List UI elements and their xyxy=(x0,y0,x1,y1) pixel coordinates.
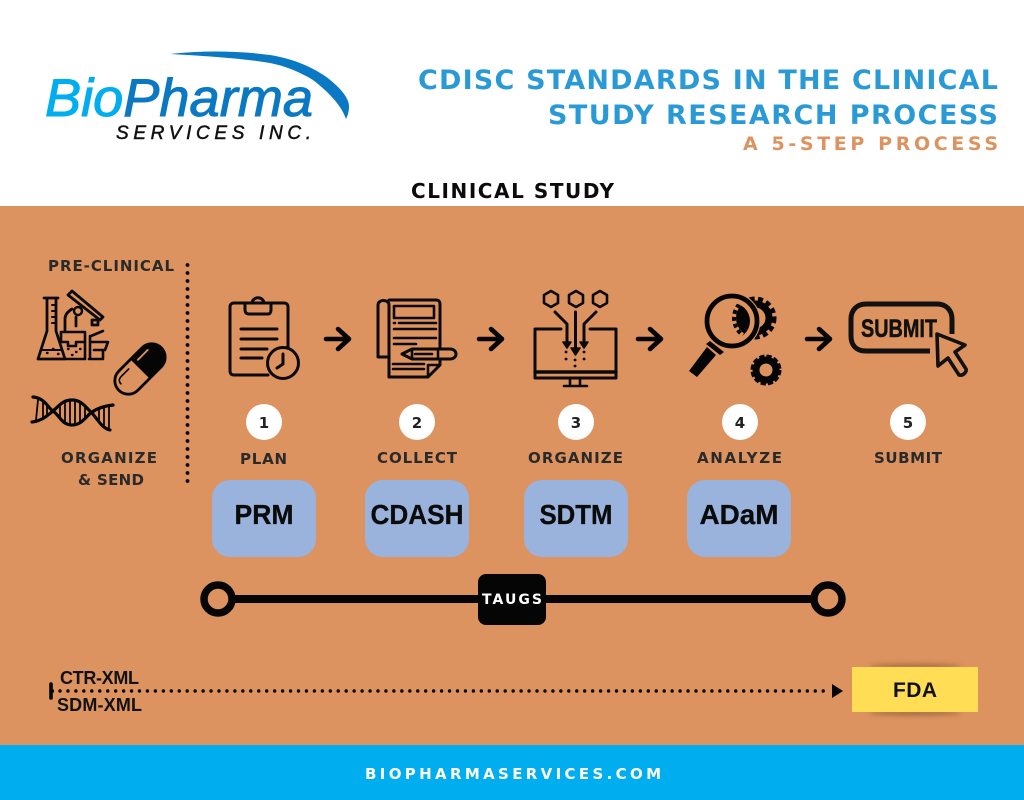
step 5: submit xyxy=(851,304,966,467)
number 4 xyxy=(722,404,758,440)
heading: clinical study: CLINICAL STUDY xyxy=(411,179,615,203)
label: organize and send: & SEND xyxy=(78,471,144,489)
box: ADaM: ADaM xyxy=(700,499,778,530)
step 1: plan xyxy=(212,298,316,557)
title: STUDY RESEARCH PROCESS xyxy=(548,100,998,131)
arrow: analyze to submit xyxy=(807,329,830,349)
icon: submit button with cursor: SUBMIT xyxy=(861,315,937,343)
icon: submit button with cursor xyxy=(851,304,966,375)
arrow: organize to analyze xyxy=(638,329,661,349)
divider: pre-clinical boundary xyxy=(186,265,189,483)
number 4: 4 xyxy=(735,414,745,432)
logo: BioPharma Services Inc.: SERVICES INC. xyxy=(116,123,311,144)
number 3: 3 xyxy=(571,414,581,432)
number 1 xyxy=(246,404,282,440)
box: SDTM: SDTM xyxy=(540,499,612,530)
number 3 xyxy=(558,404,594,440)
arrow: dotted line to FDA xyxy=(51,684,843,698)
label: analyze: ANALYZE xyxy=(697,449,782,467)
title xyxy=(418,65,998,131)
icon: laboratory equipment xyxy=(38,291,108,359)
step 3: organize xyxy=(524,291,628,557)
step 2: collect xyxy=(365,300,469,557)
panel: pre-clinical xyxy=(32,257,174,489)
box: CDASH xyxy=(365,480,469,557)
label: CTR-XML: CTR-XML xyxy=(60,668,139,688)
label: organize and send xyxy=(61,449,157,489)
number 5 xyxy=(890,404,926,440)
icon: clipboard with clock xyxy=(230,298,298,378)
box: CDASH: CDASH xyxy=(370,499,464,530)
label: collect: COLLECT xyxy=(377,449,458,467)
footer xyxy=(0,745,1024,800)
logo: BioPharma Services Inc. xyxy=(45,51,349,144)
title: CDISC STANDARDS IN THE CLINICAL xyxy=(418,65,998,96)
icon: DNA helix xyxy=(32,397,113,430)
panel: process background xyxy=(0,206,1024,745)
FDA box: FDA xyxy=(893,679,937,702)
label: organize and send: ORGANIZE xyxy=(61,449,157,467)
number 2 xyxy=(399,404,435,440)
number 1: 1 xyxy=(259,414,269,432)
icon: document with pen xyxy=(378,300,456,377)
TAUGS timeline: TAUGS xyxy=(482,592,542,608)
icon: magnifier and gears xyxy=(689,294,780,384)
heading: pre-clinical: PRE-CLINICAL xyxy=(48,257,174,275)
footer: BIOPHARMASERVICES.COM xyxy=(365,765,661,783)
FDA box xyxy=(852,664,978,716)
logo: BioPharma Services Inc.: BioPharma xyxy=(45,69,313,128)
label: plan: PLAN xyxy=(240,450,287,468)
box: ADaM xyxy=(687,480,791,557)
number 2: 2 xyxy=(412,414,422,432)
box: PRM: PRM xyxy=(234,499,294,530)
XML submission line xyxy=(51,668,843,715)
icon: capsule xyxy=(109,338,171,400)
step 4: analyze xyxy=(687,294,791,557)
box: SDTM xyxy=(524,480,628,557)
label: SDM-XML: SDM-XML xyxy=(57,695,142,715)
arrow: plan to collect xyxy=(326,329,349,349)
subtitle: A 5-STEP PROCESS xyxy=(743,133,998,155)
TAUGS timeline xyxy=(204,574,842,625)
number 5: 5 xyxy=(903,414,913,432)
arrow: collect to organize xyxy=(479,329,502,349)
icon: monitor with data flow xyxy=(535,291,616,386)
label: organize: ORGANIZE xyxy=(528,449,623,467)
label: submit: SUBMIT xyxy=(874,449,943,467)
box: PRM xyxy=(212,480,316,557)
